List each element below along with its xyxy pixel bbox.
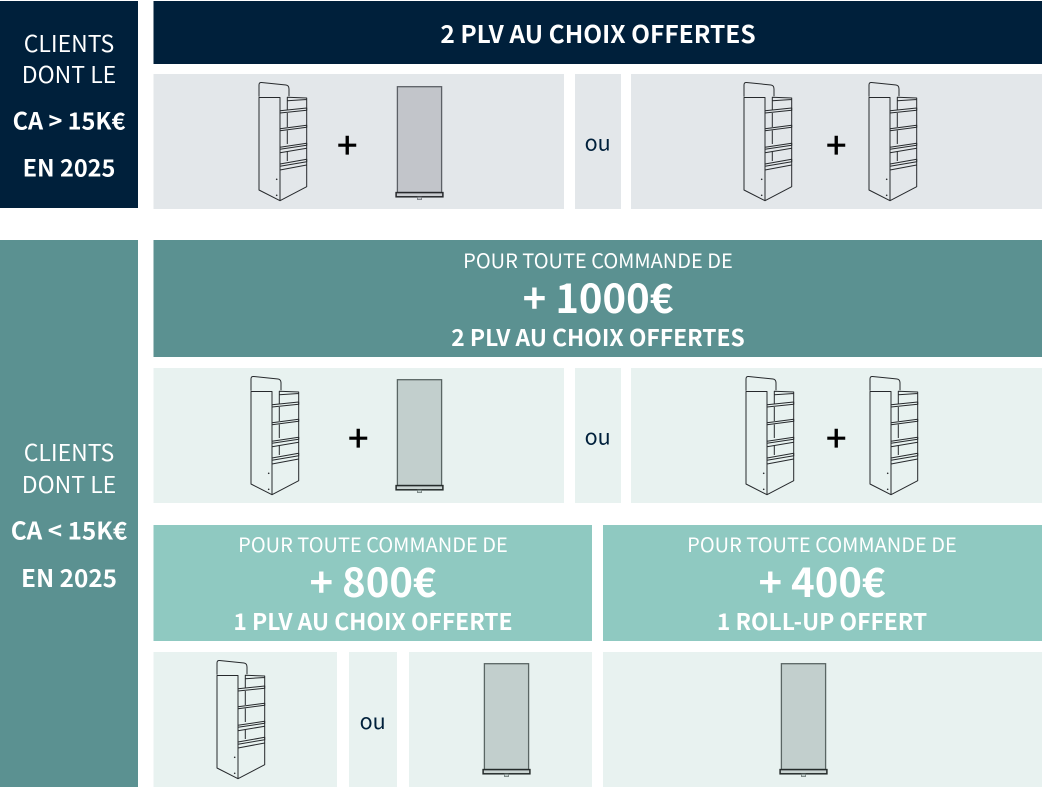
panel: two shelves option (top): + xyxy=(826,118,846,170)
panel: shelf plus roll-up option (1000€) xyxy=(154,368,564,503)
panel: clients CA > 15K€ xyxy=(0,1,138,208)
panel: clients CA < 15K€: CLIENTS xyxy=(24,434,114,468)
panel: ou separator (top): ou xyxy=(585,126,611,158)
heading: commande + 1000€ xyxy=(154,240,1042,357)
heading: commande + 400€: 1 ROLL-UP OFFERT xyxy=(717,604,927,637)
heading: commande + 400€ xyxy=(603,525,1042,641)
panel: shelf plus roll-up option (top): + xyxy=(337,118,357,170)
panel: clients CA > 15K€: CLIENTS xyxy=(24,25,114,59)
panel: ou separator (800€): ou xyxy=(360,705,386,736)
panel: ou separator (top) xyxy=(575,74,621,209)
heading: 2 PLV au choix offertes (navy) xyxy=(154,1,1042,64)
panel: clients CA > 15K€: DONT LE xyxy=(22,56,116,90)
heading: commande + 800€: POUR TOUTE COMMANDE DE xyxy=(238,529,508,558)
panel: ou separator (1000€): ou xyxy=(585,420,611,452)
heading: commande + 1000€: POUR TOUTE COMMANDE DE xyxy=(463,245,733,274)
panel: roll-up option (800€) xyxy=(409,652,592,787)
panel: two shelves option (top) xyxy=(631,74,1042,209)
panel: clients CA < 15K€ xyxy=(0,240,138,787)
panel: clients CA > 15K€: EN 2025 xyxy=(23,150,115,184)
heading: commande + 400€: + 400€ xyxy=(758,551,886,609)
panel: ou separator (800€) xyxy=(349,652,397,787)
panel: clients CA > 15K€: CA > 15K€ xyxy=(13,103,125,137)
panel: clients CA < 15K€: DONT LE xyxy=(22,466,116,500)
heading: 2 PLV au choix offertes (navy): 2 PLV AU CHOIX OFFERTES xyxy=(440,16,756,51)
heading: commande + 800€: + 800€ xyxy=(309,551,437,609)
panel: ou separator (1000€) xyxy=(575,368,621,503)
panel: roll-up (400€) xyxy=(603,652,1042,787)
panel: clients CA < 15K€: CA < 15K€ xyxy=(11,512,128,546)
panel: shelf plus roll-up option (1000€): + xyxy=(348,411,368,463)
heading: commande + 800€: 1 PLV AU CHOIX OFFERTE xyxy=(233,604,513,637)
panel: clients CA < 15K€: EN 2025 xyxy=(21,559,117,594)
panel: two shelves option (1000€) xyxy=(631,368,1042,503)
heading: commande + 1000€: + 1000€ xyxy=(523,267,674,325)
panel: shelf plus roll-up option (top) xyxy=(154,74,564,209)
panel: shelf option (800€) xyxy=(154,652,337,787)
panel: two shelves option (1000€): + xyxy=(826,411,846,463)
heading: commande + 400€: POUR TOUTE COMMANDE DE xyxy=(687,529,957,558)
heading: commande + 800€ xyxy=(154,525,592,641)
heading: commande + 1000€: 2 PLV AU CHOIX OFFERTES xyxy=(451,320,745,353)
